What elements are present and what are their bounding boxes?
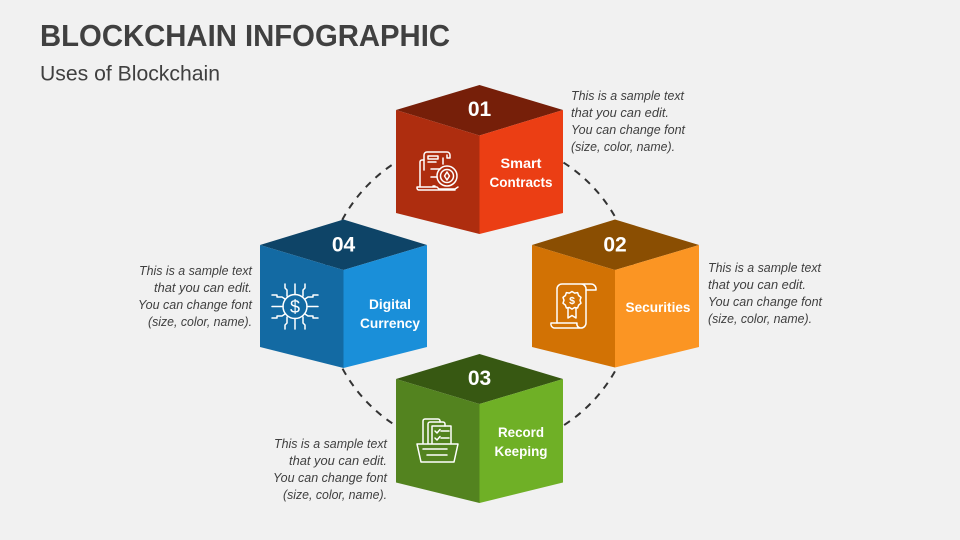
number 04: 04 (332, 234, 355, 256)
cube 01: smart contracts (396, 85, 563, 234)
icon glyph: dollar: $ (290, 297, 300, 317)
text block: 04: (size, color, name). (148, 315, 252, 329)
text block: 03: This is a sample text (274, 437, 388, 451)
number 02: 02 (603, 234, 627, 256)
text block: 01: that you can edit. (571, 106, 669, 120)
text block: 03: that you can edit. (289, 454, 387, 468)
text block: 02: This is a sample text (708, 261, 822, 275)
text block: 01: (size, color, name). (571, 140, 675, 154)
text block: 04: You can change font (138, 298, 253, 312)
label: keeping: Keeping (494, 443, 548, 459)
number 03: 03 (468, 367, 491, 390)
cube 02: securities (532, 220, 699, 368)
subtitle: Uses of Blockchain (40, 62, 220, 86)
label: smart: Smart (500, 155, 542, 171)
text block: 02: You can change font (708, 295, 823, 309)
text block: 02: that you can edit. (708, 278, 806, 292)
title: BLOCKCHAIN INFOGRAPHIC (40, 18, 450, 53)
text block: 02 (708, 261, 823, 326)
text block: 04: that you can edit. (154, 281, 252, 295)
cube 04: digital currency (260, 220, 427, 368)
icon: folder with records (417, 419, 458, 462)
text block: 02: (size, color, name). (708, 312, 812, 326)
cube 03: record keeping (396, 354, 563, 503)
label: currency: Currency (360, 315, 420, 331)
text block: 01 (571, 89, 686, 154)
icon glyph: dollar: $ (569, 295, 575, 307)
text block: 01: You can change font (571, 123, 686, 137)
number 01: 01 (468, 98, 491, 121)
icon: certificate scroll (551, 284, 596, 328)
text block: 01: This is a sample text (571, 89, 685, 103)
text block: 03 (273, 437, 388, 502)
label: digital: Digital (369, 296, 411, 312)
text block: 04: This is a sample text (139, 264, 253, 278)
icon: dollar network (272, 284, 318, 329)
label: securities: Securities (626, 299, 691, 315)
text block: 03: (size, color, name). (283, 488, 387, 502)
text block: 03: You can change font (273, 471, 388, 485)
label: record: Record (498, 424, 544, 440)
text block: 04 (138, 264, 253, 329)
label: contracts: Contracts (490, 174, 553, 190)
dashed ring (324, 138, 636, 450)
icon: contract on laptop (417, 152, 458, 190)
